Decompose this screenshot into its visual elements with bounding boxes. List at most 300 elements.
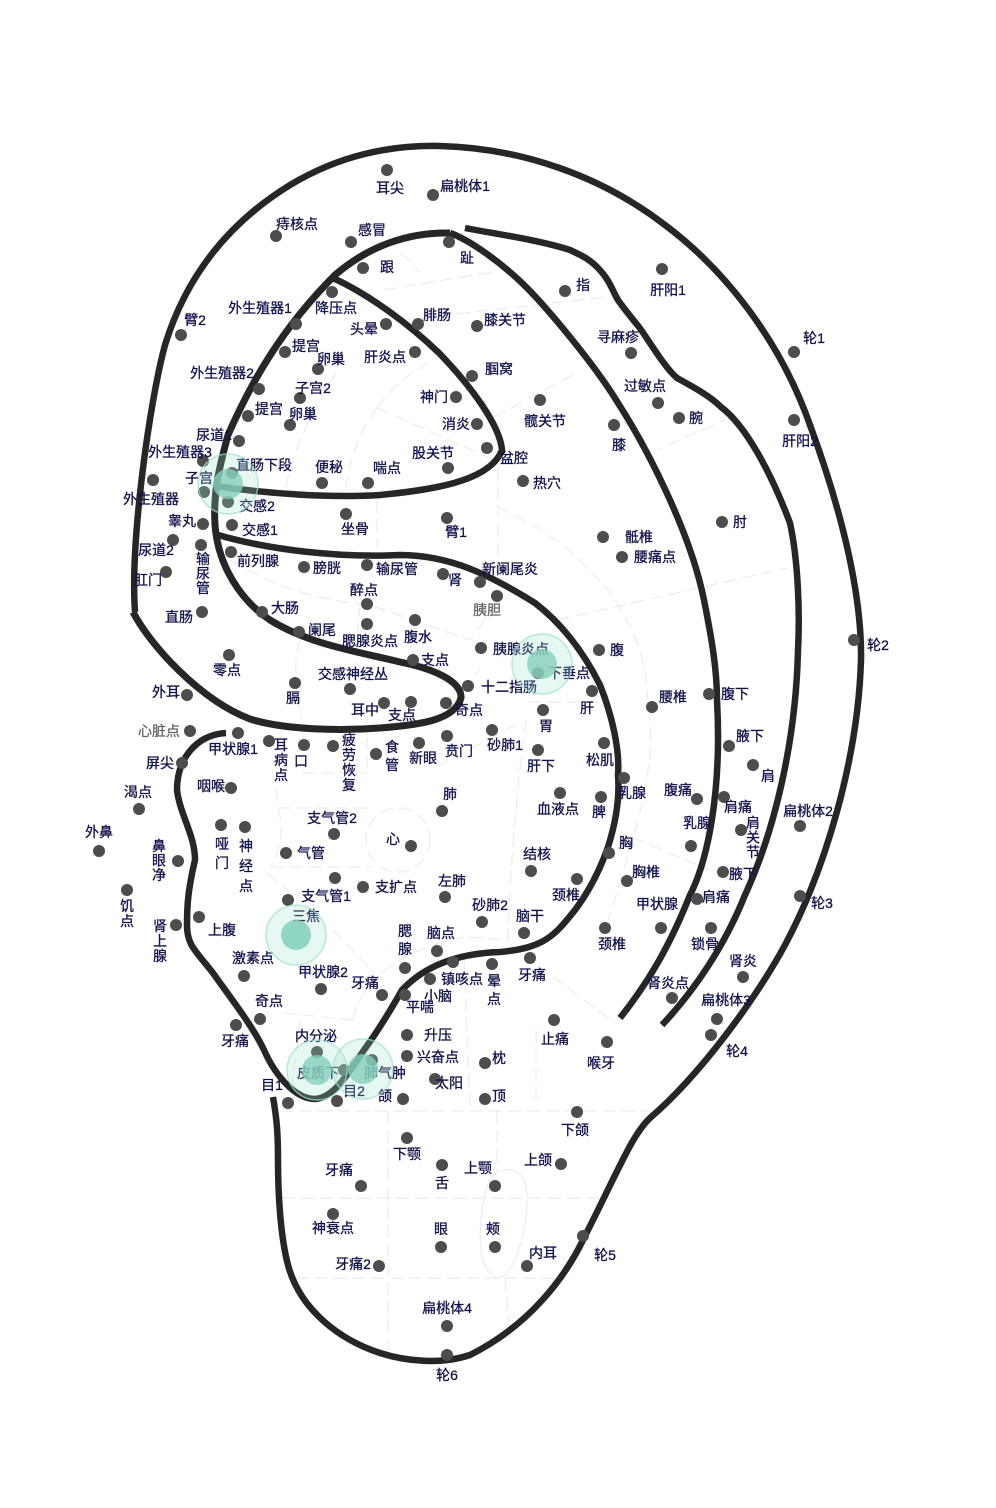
point: 醉点 <box>350 582 378 610</box>
point: 食管 vertical: 食 <box>385 739 399 755</box>
point: 血液点 <box>537 787 579 817</box>
point: 尿道2 <box>138 534 179 558</box>
point: 鼻眼净 vertical <box>152 838 184 883</box>
point: 砂肺2: 砂肺2 <box>472 897 508 913</box>
point: 痔核点: 痔核点 <box>276 216 318 232</box>
point: 尿道2: 尿道2 <box>138 542 174 558</box>
point: 下颌 <box>561 1106 589 1138</box>
point: 鼻眼净 vertical: 眼 <box>152 852 166 868</box>
point: 感冒: 感冒 <box>358 222 386 238</box>
point: 消炎 <box>442 416 483 432</box>
point: 贲门: 贲门 <box>445 743 473 759</box>
point: 心 <box>386 831 417 852</box>
point: 臂1: 臂1 <box>445 524 467 540</box>
label: 三焦: 三焦 <box>292 908 320 924</box>
point: 目1: 目1 <box>261 1077 283 1093</box>
point: 疲劳恢复 vertical: 劳 <box>342 747 356 763</box>
point: 皮质下: 皮质下 <box>297 1065 339 1081</box>
point: 下颌: 下颌 <box>561 1122 589 1138</box>
point: 晕点 vertical <box>486 958 501 1007</box>
acupoints group <box>85 164 889 1383</box>
point: 晕点 vertical: 点 <box>487 991 501 1007</box>
point: 牙痛 middle: 牙痛 <box>351 975 379 991</box>
point: 心: 心 <box>386 831 400 847</box>
point: 神门: 神门 <box>420 389 448 405</box>
point: 腋下 lower: 腋下 <box>729 866 757 882</box>
point: 耳中 <box>351 697 390 718</box>
point: 骶椎: 骶椎 <box>625 529 653 545</box>
point: 轮5 <box>577 1230 616 1263</box>
highlight: 下垂点 area <box>512 634 572 694</box>
point: 膈 <box>286 677 301 706</box>
point: 热穴 <box>517 475 561 491</box>
point: 过敏点: 过敏点 <box>624 378 666 394</box>
point: 神衰点: 神衰点 <box>312 1220 354 1236</box>
point: 髋关节 <box>524 394 566 429</box>
point: 肝阳1: 肝阳1 <box>650 282 686 298</box>
point: 哑门 vertical: 哑 <box>215 836 229 852</box>
point: 交感1 <box>226 519 278 538</box>
point: 脾: 脾 <box>592 804 606 820</box>
point: 内分泌: 内分泌 <box>295 1028 337 1044</box>
point: 趾: 趾 <box>460 250 474 266</box>
point: 腕: 腕 <box>689 410 703 426</box>
point: 枕 <box>479 1050 506 1069</box>
point: 耳尖 <box>376 164 404 196</box>
point: 股关节: 股关节 <box>412 445 454 461</box>
point: 目2 <box>331 1083 365 1107</box>
point: 降压点 <box>315 286 357 316</box>
point: 锁骨: 锁骨 <box>691 936 719 952</box>
point: 目2: 目2 <box>343 1083 365 1099</box>
point: 腹: 腹 <box>610 642 624 658</box>
point: 新阑尾炎: 新阑尾炎 <box>482 561 538 577</box>
point: 指 <box>559 277 590 297</box>
point: 髋关节: 髋关节 <box>524 413 566 429</box>
point: 内分泌 <box>295 1028 337 1058</box>
highlight: 肺气肿 <box>333 1039 393 1099</box>
point: 胃 <box>537 704 553 734</box>
point: 肾上腺 vertical <box>153 918 182 964</box>
point: 膀胱 <box>298 560 341 576</box>
point: 轮6 <box>436 1349 458 1383</box>
point: 寻麻疹: 寻麻疹 <box>597 329 639 345</box>
point: 输尿管 <box>361 559 418 577</box>
point: 腮腺炎点: 腮腺炎点 <box>342 633 398 649</box>
point: 腮腺 vertical: 腺 <box>398 941 412 957</box>
point: 扁桃体3 <box>701 992 751 1025</box>
point: 臂1 <box>441 512 467 540</box>
point: 顶 <box>479 1088 506 1105</box>
point: 扁桃体3: 扁桃体3 <box>701 992 751 1008</box>
point: 胸: 胸 <box>619 835 633 851</box>
point: 肝炎点: 肝炎点 <box>364 349 406 365</box>
point: 肩关节 vertical: 关 <box>746 830 760 846</box>
point: 耳中: 耳中 <box>351 702 379 718</box>
point: 肘 <box>716 514 747 530</box>
point: 肩: 肩 <box>761 768 775 784</box>
point: 肾炎 <box>729 953 757 983</box>
point: 提宫 upper: 提宫 <box>292 338 320 354</box>
point: 上颌 <box>524 1152 567 1170</box>
point: 交感2: 交感2 <box>239 498 275 514</box>
point: 砂肺1: 砂肺1 <box>487 737 523 753</box>
point: 腋下 upper <box>723 728 764 752</box>
point: 痔核点 <box>270 216 318 242</box>
point: 止痛: 止痛 <box>541 1031 569 1047</box>
point: 坐骨 <box>340 508 369 537</box>
point: 颊 <box>486 1221 501 1253</box>
point: 甲状腺 <box>636 896 678 934</box>
point: 腮腺 vertical <box>398 923 412 974</box>
point: 上腹 <box>193 911 236 938</box>
point: 膝: 膝 <box>612 437 626 453</box>
point: 轮4 <box>705 1029 748 1059</box>
point: 跟 <box>357 259 394 275</box>
point: 神衰点 <box>312 1208 354 1236</box>
point: 口 <box>294 739 310 769</box>
point: 新眼 <box>409 737 437 766</box>
point: 指: 指 <box>576 277 590 293</box>
point: 耳病点 vertical <box>263 735 288 783</box>
point: 提宫 lower: 提宫 <box>255 401 283 417</box>
point: 上颚: 上颚 <box>464 1160 492 1176</box>
point: 耳病点 vertical: 点 <box>274 767 288 783</box>
point: 枕: 枕 <box>492 1050 506 1066</box>
point: 乳腺 right: 乳腺 <box>683 815 711 831</box>
point: 喘点: 喘点 <box>373 460 401 476</box>
point: 肝下 <box>527 744 555 774</box>
point: 砂肺1 <box>486 724 523 753</box>
point: 松肌: 松肌 <box>586 752 614 768</box>
point: 肾上腺 vertical: 肾 <box>153 918 167 934</box>
point: 气管: 气管 <box>297 845 325 861</box>
point: 升压: 升压 <box>424 1027 452 1043</box>
point: 咽喉: 咽喉 <box>197 778 225 794</box>
point: 肝炎点 <box>364 346 421 365</box>
point: 升压 <box>401 1027 452 1043</box>
point: 胰胆: 胰胆 <box>473 602 501 618</box>
point: 肾炎点: 肾炎点 <box>647 975 689 991</box>
point: 渴点: 渴点 <box>124 784 152 800</box>
point: 腹痛 <box>664 782 703 805</box>
point: 胃: 胃 <box>539 718 553 734</box>
point: 膝关节: 膝关节 <box>484 312 526 328</box>
point: 输尿管 vertical: 输 <box>196 551 210 567</box>
point: 下颚: 下颚 <box>393 1146 421 1162</box>
point: 神经点 vertical: 经 <box>239 858 253 874</box>
point: 腰椎: 腰椎 <box>659 689 687 705</box>
point: 肩关节 vertical <box>735 815 760 860</box>
point: 交感1: 交感1 <box>242 522 278 538</box>
point: 疲劳恢复 vertical <box>327 732 356 793</box>
point: 支扩点: 支扩点 <box>375 879 417 895</box>
point: 降压点: 降压点 <box>315 300 357 316</box>
point: 子宫2 <box>294 380 331 404</box>
point: 肩关节 vertical: 肩 <box>746 815 760 831</box>
point: 牙痛 lower left <box>221 1019 249 1049</box>
point: 输尿管 vertical: 管 <box>196 580 210 596</box>
point: 太阳: 太阳 <box>435 1075 463 1091</box>
point: 颈椎 lower: 颈椎 <box>598 936 626 952</box>
point: 直肠 <box>165 606 208 625</box>
point: 腋下 upper: 腋下 <box>736 728 764 744</box>
point: 肺 <box>436 786 457 817</box>
point: 尿道1: 尿道1 <box>196 427 232 443</box>
point: 腹 <box>593 642 624 658</box>
point: 股关节 <box>412 445 454 474</box>
point: 膝关节 <box>471 312 526 332</box>
point: 眼 <box>434 1221 448 1253</box>
point: 支点: 支点 <box>388 707 416 723</box>
point: 过敏点 <box>624 378 666 409</box>
point: 颌 <box>378 1088 409 1105</box>
point: 腓肠 <box>412 307 451 330</box>
point: 肝下: 肝下 <box>527 758 555 774</box>
point: 气管 <box>280 845 325 861</box>
point: 牙痛2: 牙痛2 <box>335 1256 371 1272</box>
point: 肾上腺 vertical: 上 <box>153 933 167 949</box>
point: 左肺: 左肺 <box>438 873 466 889</box>
point: 神经点 vertical: 点 <box>239 878 253 894</box>
point: 左肺 <box>438 873 466 903</box>
point: 肝阳1 <box>650 263 686 298</box>
point: 结核: 结核 <box>523 846 551 862</box>
point: 镇咳点 <box>441 956 483 987</box>
point: 肺气肿 <box>364 1054 406 1081</box>
upper concha loop <box>215 278 502 496</box>
helix band <box>133 233 461 729</box>
point: 上腹: 上腹 <box>208 922 236 938</box>
point: 肛门: 肛门 <box>134 572 162 588</box>
point: 醉点: 醉点 <box>350 582 378 598</box>
point: 小脑 <box>424 973 452 1004</box>
point: 腹下 <box>703 686 749 702</box>
point: 甲状腺1: 甲状腺1 <box>208 741 258 757</box>
point: 颈椎 lower <box>598 922 626 952</box>
point: 轮1 <box>788 330 825 358</box>
point: 胸 <box>603 835 633 859</box>
point: 交感神经丛 <box>318 666 388 695</box>
point: 疲劳恢复 vertical: 疲 <box>342 732 356 748</box>
point: 轮4: 轮4 <box>726 1043 748 1059</box>
point: 轮2 <box>848 634 889 653</box>
point: 肩关节 vertical: 节 <box>746 844 760 860</box>
antihelix curve outer <box>465 228 799 1025</box>
point: 甲状腺: 甲状腺 <box>636 896 678 912</box>
point: 轮6: 轮6 <box>436 1367 458 1383</box>
point: 奇点: 奇点 <box>455 702 483 718</box>
point: 外生殖器2: 外生殖器2 <box>190 365 254 381</box>
point: 牙痛 middle <box>351 975 388 1001</box>
point: 阑尾: 阑尾 <box>308 622 336 638</box>
point: 输尿管: 输尿管 <box>376 561 418 577</box>
point: 跟: 跟 <box>380 259 394 275</box>
antihelix curve inner <box>450 233 718 1018</box>
point: 外生殖器2 <box>190 365 265 395</box>
point: 膝 <box>608 419 626 453</box>
point: 腹痛: 腹痛 <box>664 782 692 798</box>
point: 饥点 vertical: 饥 <box>120 898 134 914</box>
point: 内耳: 内耳 <box>529 1245 557 1261</box>
point: 乳腺 right <box>683 815 711 852</box>
point: 腮腺 vertical: 腮 <box>398 923 412 939</box>
point: 腮腺炎点 <box>342 618 398 649</box>
point: 肝阳2 <box>782 414 818 449</box>
point: 牙痛 lobe <box>325 1162 367 1192</box>
point: 支气管2 <box>307 810 357 840</box>
point: 食管 vertical <box>370 739 399 773</box>
point: 卵巢 lower: 卵巢 <box>289 406 317 422</box>
point: 血液点: 血液点 <box>537 801 579 817</box>
point: 渴点 <box>124 784 152 815</box>
point: 外鼻: 外鼻 <box>85 824 113 840</box>
point: 肝: 肝 <box>580 700 594 716</box>
point: 顶: 顶 <box>492 1088 506 1104</box>
point: 激素点 <box>232 950 274 982</box>
point: 下垂点: 下垂点 <box>548 665 590 681</box>
S-shaped concha curve <box>177 535 618 1099</box>
point: 提宫 lower <box>242 401 283 422</box>
point: 前列腺: 前列腺 <box>237 553 279 569</box>
point: 大肠: 大肠 <box>271 600 299 616</box>
highlight: 子宫 area <box>198 454 258 514</box>
point: 疲劳恢复 vertical: 复 <box>342 777 356 793</box>
point: 激素点: 激素点 <box>232 950 274 966</box>
point: 甲状腺2 <box>298 964 348 995</box>
point: 便秘 <box>315 459 343 489</box>
point: 肘: 肘 <box>733 514 747 530</box>
point: 盆腔 <box>481 442 528 466</box>
point: 外耳: 外耳 <box>152 684 180 700</box>
point: 肺: 肺 <box>443 786 457 802</box>
point: 卵巢 lower <box>284 406 317 431</box>
point: 子宫2: 子宫2 <box>295 380 331 396</box>
point: 肾炎: 肾炎 <box>729 953 757 969</box>
point: 肾上腺 vertical: 腺 <box>153 948 167 964</box>
point: 零点: 零点 <box>213 662 241 678</box>
point: 颈椎 upper: 颈椎 <box>552 887 580 903</box>
point: 脾 <box>592 791 607 820</box>
point: 子宫 <box>185 470 213 498</box>
point: 胸椎 <box>621 864 660 887</box>
point: 外生殖器1: 外生殖器1 <box>228 300 292 316</box>
point: 颈椎 upper <box>552 873 583 903</box>
point: 兴奋点: 兴奋点 <box>417 1049 459 1065</box>
point: 颊: 颊 <box>486 1221 500 1237</box>
point: 饥点 vertical: 点 <box>120 913 134 929</box>
point: 鼻眼净 vertical: 鼻 <box>152 838 166 854</box>
point: 结核 <box>523 846 551 877</box>
point: 消炎: 消炎 <box>442 416 470 432</box>
point: 支气管1 <box>301 872 351 904</box>
point: 神门 <box>420 389 462 405</box>
point: 肾: 肾 <box>448 572 462 588</box>
point: 盆腔: 盆腔 <box>500 450 528 466</box>
point: 直肠下段: 直肠下段 <box>236 457 292 473</box>
point: 腹水: 腹水 <box>404 629 432 645</box>
point: 轮2: 轮2 <box>867 637 889 653</box>
point: 外鼻 <box>85 824 113 857</box>
highlight: 皮质下 <box>287 1040 347 1100</box>
point: 外生殖器: 外生殖器 <box>123 491 179 507</box>
point: 支点 right: 支点 <box>421 652 449 668</box>
point: 阑尾 <box>293 622 336 638</box>
point: 睾丸: 睾丸 <box>168 513 196 529</box>
point: 哑门 vertical <box>215 819 229 871</box>
point: 输尿管 vertical: 尿 <box>196 566 210 582</box>
point: 眼: 眼 <box>434 1221 448 1237</box>
point: 交感神经丛: 交感神经丛 <box>318 666 388 682</box>
point: 交感2 <box>222 496 275 514</box>
point: 臂2: 臂2 <box>184 312 206 328</box>
point: 肾炎点 <box>647 975 689 1004</box>
point: 扁桃体2 <box>783 803 833 832</box>
point: 新阑尾炎 <box>474 561 538 588</box>
point: 脑点: 脑点 <box>427 925 455 941</box>
point: 饥点 vertical <box>120 884 134 929</box>
point: 扁桃体1: 扁桃体1 <box>440 178 490 194</box>
point: 耳病点 vertical: 病 <box>274 752 288 768</box>
point: 外耳 <box>152 684 193 701</box>
point: 骶椎 <box>597 529 653 545</box>
point: 喘点 <box>362 460 401 489</box>
point: 直肠下段 <box>226 457 292 479</box>
point: 腹下: 腹下 <box>721 686 749 702</box>
point: 牙痛 right: 牙痛 <box>518 967 546 983</box>
point: 肝 <box>580 685 598 716</box>
point: 口: 口 <box>294 753 308 769</box>
point: 胸椎: 胸椎 <box>632 864 660 880</box>
point: 镇咳点: 镇咳点 <box>441 971 483 987</box>
point: 舌: 舌 <box>435 1175 449 1191</box>
point: 腘窝 <box>466 361 513 382</box>
point: 止痛 <box>541 1014 569 1047</box>
point: 轮3 <box>794 890 833 911</box>
point: 胰腺炎点: 胰腺炎点 <box>493 641 549 657</box>
ear outline <box>134 146 861 1361</box>
point: 肾 <box>437 568 462 588</box>
point: 砂肺2 <box>472 897 508 928</box>
point: 神经点 vertical <box>239 821 253 894</box>
point: 甲状腺1 <box>208 727 258 757</box>
point: 感冒 <box>345 222 386 248</box>
highlight: 三焦 <box>266 905 326 965</box>
point: 乳腺 left: 乳腺 <box>618 785 646 801</box>
point: 腓肠: 腓肠 <box>423 307 451 323</box>
point: 乳腺 left <box>618 772 646 801</box>
point: 扁桃体4: 扁桃体4 <box>422 1300 472 1316</box>
point: 肩 <box>747 759 775 784</box>
point: 肝阳2: 肝阳2 <box>782 433 818 449</box>
point: 趾 <box>443 236 474 266</box>
point: 上颚 <box>464 1160 501 1192</box>
point: 膈: 膈 <box>286 690 300 706</box>
point: 肩痛 upper: 肩痛 <box>724 799 752 815</box>
point: 奇点 lower: 奇点 <box>255 993 283 1009</box>
point: 新眼: 新眼 <box>409 750 437 766</box>
point: 头晕: 头晕 <box>350 321 378 337</box>
point: 肩痛 upper <box>718 791 752 815</box>
point: 轮5: 轮5 <box>594 1247 616 1263</box>
point: 牙痛 right <box>518 952 546 983</box>
point: 前列腺 <box>225 546 279 569</box>
point: 热穴: 热穴 <box>533 475 561 491</box>
point: 外生殖器1 <box>228 300 302 330</box>
point: 平喘 <box>399 989 434 1015</box>
point: 心脏点: 心脏点 <box>138 723 180 739</box>
point: 平喘: 平喘 <box>406 999 434 1015</box>
